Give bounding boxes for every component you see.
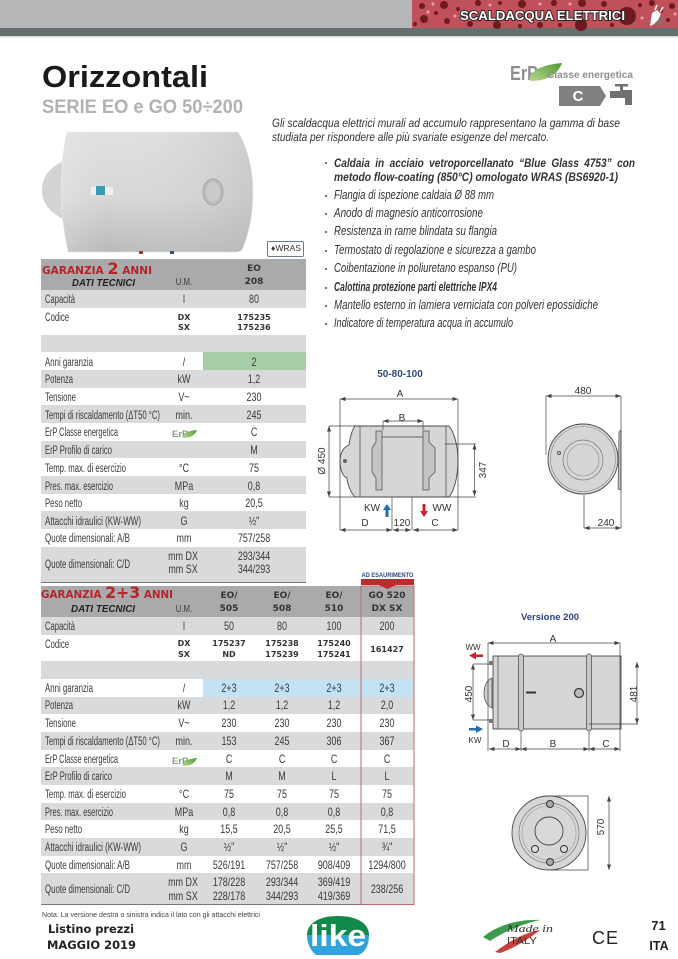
subtitle: SERIE EO e GO 50÷200 bbox=[42, 97, 243, 118]
column GO 520 values: 75 bbox=[382, 789, 392, 801]
table 1 values: 0,8 bbox=[248, 481, 260, 493]
dimension lines bbox=[546, 396, 621, 528]
column EO/510 values: 75 bbox=[329, 789, 339, 801]
table 2 labels: Tensione bbox=[45, 718, 76, 730]
dimension labels bbox=[317, 389, 489, 529]
column GO 520 values: 200 bbox=[380, 621, 395, 633]
table 1 values: 1,2 bbox=[248, 374, 260, 386]
table 1 labels: Temp. max. di esercizio bbox=[45, 463, 126, 475]
column GO 520 values: 238/256 bbox=[371, 884, 403, 896]
table 1 labels: Potenza bbox=[45, 374, 73, 386]
feature list: metodo flow-coating (850°C) omologato WRAS (BS6920-1) bbox=[334, 172, 618, 184]
column EO/505 values: 153 bbox=[222, 736, 237, 748]
table 2 units: kW bbox=[178, 700, 191, 712]
column EO/508 values: 230 bbox=[275, 718, 290, 730]
AD ESAURIMENTO tag: AD ESAURIMENTO bbox=[362, 572, 414, 579]
price list date: Listino prezzi bbox=[48, 922, 134, 936]
table 2 header: GO 520 bbox=[369, 591, 405, 601]
dimension labels: C bbox=[431, 518, 439, 529]
column EO/510 values bbox=[317, 621, 351, 903]
energy class badge bbox=[510, 63, 633, 106]
arrow: cold water in bbox=[383, 504, 391, 517]
diagram title: 50-80-100 bbox=[377, 369, 423, 380]
column EO/508 values: 175239 bbox=[265, 650, 299, 659]
column EO/508 values: 293/344 bbox=[266, 877, 298, 889]
table 2 labels: Anni garanzia bbox=[45, 683, 93, 695]
tank outline bbox=[484, 656, 621, 729]
footnote: Nota: La versione destra o sinistra indica il lato con gli attacchi elettrici bbox=[42, 910, 260, 919]
table 2 units: kg bbox=[179, 824, 189, 836]
column EO/505 values: 15,5 bbox=[220, 824, 238, 836]
icon: tap bbox=[610, 84, 632, 105]
page number: 71 bbox=[651, 918, 666, 933]
table 1 labels: Tempi di riscaldamento (ΔT50 °C) bbox=[45, 410, 160, 422]
table 1 labels: Peso netto bbox=[45, 498, 82, 510]
table 1 values: 75 bbox=[249, 463, 259, 475]
diagram: models 50-80-100 side view bbox=[317, 369, 489, 530]
column EO/510 values: ½" bbox=[329, 842, 340, 854]
column EO/505 values: 526/191 bbox=[213, 860, 245, 872]
dimension labels: 450 bbox=[464, 685, 475, 702]
price list date bbox=[47, 922, 136, 952]
mounting plate bbox=[618, 430, 621, 490]
table 1 units: V~ bbox=[178, 392, 190, 404]
column EO/510 values: L bbox=[332, 771, 337, 783]
column EO/510 values: 25,5 bbox=[325, 824, 343, 836]
column EO/508 values: 344/293 bbox=[266, 891, 298, 903]
mounting straps bbox=[518, 654, 592, 731]
icon: ErP small: ErP bbox=[172, 756, 189, 767]
title: Orizzontali bbox=[42, 60, 208, 94]
table 1 units: MPa bbox=[175, 481, 193, 493]
column EO/508 values bbox=[265, 621, 299, 903]
column EO/508 values: 80 bbox=[277, 621, 287, 633]
table 2 labels: ErP Profilo di carico bbox=[45, 771, 112, 783]
column EO/508 values: 757/258 bbox=[266, 860, 298, 872]
table 2 labels: Tempi di riscaldamento (ΔT50 °C) bbox=[45, 736, 160, 748]
column EO/508 values: 245 bbox=[275, 736, 290, 748]
table 1 units: DX bbox=[178, 313, 191, 322]
dimension labels: KW bbox=[364, 503, 381, 514]
table 1 units: / bbox=[183, 357, 185, 369]
column EO/510 values: 230 bbox=[327, 718, 342, 730]
column GO 520 values: 0,8 bbox=[381, 807, 393, 819]
logo: like: like bbox=[310, 918, 366, 953]
feature list: Resistenza in rame blindata su flangia bbox=[334, 224, 497, 238]
column GO 520 red highlight frame bbox=[361, 586, 414, 904]
logo: made in Italy: Made in bbox=[506, 924, 553, 935]
table 2 units: min. bbox=[176, 736, 192, 748]
table 1 values: 20,5 bbox=[245, 498, 263, 510]
column GO 520 values: C bbox=[384, 754, 391, 766]
heater pipe connections bbox=[139, 251, 174, 254]
table 1 units: kW bbox=[178, 374, 191, 386]
table 2 header: GARANZIA 2+3 ANNI bbox=[41, 583, 173, 602]
column GO 520 values: 1294/800 bbox=[368, 860, 406, 872]
column EO/508 values: C bbox=[279, 754, 286, 766]
banner: red water drops bbox=[412, 0, 678, 31]
heater thermostat dial bbox=[203, 179, 223, 205]
column EO/510 values: 0,8 bbox=[328, 807, 340, 819]
table 1 header: DATI TECNICI bbox=[72, 278, 135, 289]
dimension labels: 240 bbox=[598, 518, 615, 529]
column EO/508 values: 1,2 bbox=[276, 700, 288, 712]
table 1 values: 80 bbox=[249, 294, 259, 306]
table 1 labels: Tensione bbox=[45, 392, 76, 404]
feature list: Calottina protezione parti elettriche IPX4 bbox=[334, 280, 497, 294]
feature list: Indicatore di temperatura acqua in accumulo bbox=[334, 316, 513, 330]
table 2 labels: Potenza bbox=[45, 700, 73, 712]
dimension labels: WW bbox=[465, 643, 481, 652]
dimension labels: 481 bbox=[629, 685, 640, 702]
top header band bbox=[0, 0, 678, 38]
column EO/505 values: 230 bbox=[222, 718, 237, 730]
table 1 header bbox=[41, 259, 306, 290]
table 2 labels: Codice bbox=[45, 639, 69, 651]
table 1 values: C bbox=[251, 427, 258, 439]
product photo: water heater bbox=[42, 132, 253, 254]
column EO/508 values: 75 bbox=[277, 789, 287, 801]
dimension labels: A bbox=[550, 634, 557, 645]
banner title foreground: SCALDACQUA ELETTRICI bbox=[460, 8, 625, 23]
table 1 values: M bbox=[250, 445, 258, 457]
column GO 520 values: 230 bbox=[380, 718, 395, 730]
page number: ITA bbox=[649, 939, 669, 953]
table 2 labels: ErP Classe energetica bbox=[45, 754, 118, 766]
dimension labels: 120 bbox=[394, 518, 411, 529]
table 2 units: / bbox=[183, 683, 185, 695]
diagram: models 50-80-100 front view bbox=[546, 386, 621, 529]
table 1 values: 175235 bbox=[237, 313, 271, 322]
table 2 header: EO/ bbox=[325, 591, 343, 601]
table 2 units: mm DX bbox=[168, 877, 198, 889]
column EO/508 values: M bbox=[278, 771, 286, 783]
table 2 units: mm SX bbox=[168, 891, 198, 903]
table 1 labels: Quote dimensionali: C/D bbox=[45, 559, 130, 571]
table 2 labels: Peso netto bbox=[45, 824, 82, 836]
column EO/510 values: 1,2 bbox=[328, 700, 340, 712]
mounting brackets bbox=[372, 431, 435, 490]
table 2 units: MPa bbox=[175, 807, 193, 819]
column EO/508 values: 2+3 bbox=[274, 683, 290, 695]
feature list: Termostato di regolazione e sicurezza a gambo bbox=[334, 243, 536, 257]
table 2 units: °C bbox=[179, 789, 190, 801]
dimension labels: C bbox=[602, 739, 610, 750]
ErP logo: ErP bbox=[510, 63, 538, 85]
icon: ErP small bbox=[172, 429, 197, 440]
dimension labels: 480 bbox=[575, 386, 592, 397]
dimension labels bbox=[575, 386, 615, 529]
column EO/510 values: 175241 bbox=[317, 650, 351, 659]
table 1 values: 175236 bbox=[237, 323, 271, 332]
dimension labels: B bbox=[550, 739, 557, 750]
column EO/505 values: ½" bbox=[224, 842, 235, 854]
feature list: Flangia di ispezione caldaia Ø 88 mm bbox=[334, 188, 494, 202]
column GO 520 values: 367 bbox=[380, 736, 395, 748]
table 2 units: G bbox=[181, 842, 187, 854]
table 2 row backgrounds bbox=[41, 617, 414, 905]
table 1 header: U.M. bbox=[176, 276, 192, 287]
diagram: version 200 side view bbox=[464, 612, 640, 751]
table 2 labels: Temp. max. di esercizio bbox=[45, 789, 126, 801]
table 1 values: 245 bbox=[247, 410, 262, 422]
table 2 labels: Quote dimensionali: A/B bbox=[45, 860, 130, 872]
table: garanzia 2+3 anni bbox=[41, 572, 414, 905]
banner title outline: SCALDACQUA ELETTRICI bbox=[460, 8, 625, 23]
icon: ErP small: ErP bbox=[172, 429, 189, 440]
table 1 units: kg bbox=[179, 498, 189, 510]
intro text: studiata per rispondere alle più svariate esigenze del mercato. bbox=[272, 130, 549, 144]
tank outline bbox=[340, 426, 458, 497]
arrow: hot water out bbox=[469, 652, 483, 660]
column EO/508 values: 20,5 bbox=[273, 824, 291, 836]
table 1 header: GARANZIA 2 ANNI bbox=[42, 259, 152, 278]
dimension lines bbox=[329, 399, 476, 530]
column EO/505 values: 175237 bbox=[212, 639, 246, 648]
table 1 units: G bbox=[181, 516, 187, 528]
table 2 labels: Pres. max. esercizio bbox=[45, 807, 113, 819]
column GO 520 values: L bbox=[385, 771, 390, 783]
dimension label: 570 bbox=[596, 818, 607, 835]
table 2 header: 505 bbox=[220, 604, 238, 614]
table 1 labels: Capacità bbox=[45, 294, 75, 306]
table 1 header: EO bbox=[247, 264, 261, 274]
table 1 units: °C bbox=[179, 463, 190, 475]
column EO/510 values: 175240 bbox=[317, 639, 351, 648]
table 2 header: 510 bbox=[325, 604, 343, 614]
table 2 units: DX bbox=[178, 639, 191, 648]
table 1 values: 230 bbox=[247, 392, 262, 404]
energy class label: Classe energetica bbox=[547, 69, 633, 81]
feature list: Caldaia in acciaio vetroporcellanato “Blue Glass 4753” con bbox=[334, 158, 635, 170]
column EO/505 values: 1,2 bbox=[223, 700, 235, 712]
table 1 labels: Pres. max. esercizio bbox=[45, 481, 113, 493]
column EO/510 values: 2+3 bbox=[326, 683, 342, 695]
table 2 units: V~ bbox=[178, 718, 190, 730]
table 1 values: 2 bbox=[252, 357, 257, 369]
dimension labels: D bbox=[502, 739, 510, 750]
table 2 header: U.M. bbox=[176, 603, 192, 614]
WRAS badge: ♦WRAS bbox=[271, 243, 301, 253]
table 1 units: l bbox=[183, 294, 185, 306]
column EO/505 values: ND bbox=[222, 650, 236, 659]
column EO/508 values: 0,8 bbox=[276, 807, 288, 819]
arrow: hot water out bbox=[420, 504, 428, 517]
table 1 values: 293/344 bbox=[238, 551, 270, 563]
column EO/510 values: 100 bbox=[327, 621, 342, 633]
table 2 labels: Quote dimensionali: C/D bbox=[45, 884, 130, 896]
table 2 units: l bbox=[183, 621, 185, 633]
column GO 520 values: 161427 bbox=[370, 645, 404, 654]
table 2 units bbox=[168, 621, 198, 903]
intro text bbox=[272, 116, 620, 144]
table 2 units: SX bbox=[178, 650, 191, 659]
tank circle bbox=[548, 424, 618, 494]
column EO/505 values: 75 bbox=[224, 789, 234, 801]
table 1 units: SX bbox=[178, 323, 191, 332]
column EO/510 values: 306 bbox=[327, 736, 342, 748]
column GO 520 values: 71,5 bbox=[378, 824, 396, 836]
price list date: MAGGIO 2019 bbox=[47, 938, 136, 952]
table 2 labels: Attacchi idraulici (KW-WW) bbox=[45, 842, 141, 854]
column GO 520 values bbox=[368, 621, 406, 896]
energy class arrow C: C bbox=[573, 88, 584, 105]
dimension labels: A bbox=[397, 389, 404, 400]
table 1 labels: ErP Classe energetica bbox=[45, 427, 118, 439]
column GO 520 values: ¾" bbox=[382, 842, 393, 854]
feature list: Anodo di magnesio anticorrosione bbox=[333, 206, 483, 220]
column EO/505 values: 228/178 bbox=[213, 891, 245, 903]
dimension lines bbox=[473, 643, 638, 751]
dimension labels: KW bbox=[469, 736, 482, 745]
table 1 units bbox=[168, 294, 198, 576]
table 1 values bbox=[237, 294, 271, 576]
WRAS badge bbox=[268, 242, 304, 256]
table 2 header: DATI TECNICI bbox=[71, 604, 135, 615]
dimension labels: Ø 450 bbox=[317, 447, 328, 475]
diagram: version 200 front view bbox=[512, 796, 609, 870]
dimension line bbox=[608, 796, 610, 870]
table 2 header: DX SX bbox=[372, 604, 403, 614]
column EO/505 values bbox=[212, 621, 246, 903]
dimension labels: B bbox=[399, 413, 406, 424]
logo: made in Italy bbox=[483, 920, 553, 953]
table 1 units: mm DX bbox=[168, 551, 198, 563]
intro text: Gli scaldacqua elettrici murali ad accumulo rappresentano la gamma di base bbox=[272, 116, 620, 130]
table 2 header: EO/ bbox=[273, 591, 291, 601]
column GO 520 values: 2,0 bbox=[381, 700, 393, 712]
diagram title: Versione 200 bbox=[521, 612, 579, 623]
column GO 520 values: 2+3 bbox=[379, 683, 395, 695]
heater logo label bbox=[91, 186, 113, 195]
dimension labels: 347 bbox=[478, 461, 489, 478]
column EO/505 values: 178/228 bbox=[213, 877, 245, 889]
table 2 units: mm bbox=[177, 860, 191, 872]
column EO/505 values: 50 bbox=[224, 621, 234, 633]
column EO/510 values: C bbox=[331, 754, 338, 766]
table 1 labels: Quote dimensionali: A/B bbox=[45, 533, 130, 545]
icon: electric plug bbox=[650, 5, 664, 27]
column EO/508 values: ½" bbox=[277, 842, 288, 854]
table 1 units: min. bbox=[176, 410, 192, 422]
table 1 labels: Codice bbox=[45, 312, 69, 324]
page number bbox=[649, 918, 669, 953]
table: garanzia 2 anni bbox=[41, 259, 306, 583]
column EO/505 values: M bbox=[225, 771, 233, 783]
table 1 values: ½" bbox=[249, 516, 260, 528]
dimension labels bbox=[464, 634, 640, 750]
CE mark: CE bbox=[592, 928, 619, 948]
table 2 header: 508 bbox=[273, 604, 291, 614]
dimension labels: WW bbox=[433, 503, 452, 514]
table 2 header: EO/ bbox=[220, 591, 238, 601]
table 2 labels bbox=[45, 621, 160, 896]
table 1 header: 208 bbox=[245, 277, 263, 287]
column EO/510 values: 908/409 bbox=[318, 860, 350, 872]
table 1 values: 344/293 bbox=[238, 564, 270, 576]
column EO/505 values: 0,8 bbox=[223, 807, 235, 819]
column EO/510 values: 419/369 bbox=[318, 891, 350, 903]
table 1 labels: ErP Profilo di carico bbox=[45, 445, 112, 457]
logo: made in Italy: ITALY bbox=[507, 936, 537, 947]
tank circle bbox=[512, 796, 588, 870]
table 1 units: mm bbox=[177, 533, 191, 545]
feature list: Coibentazione in poliuretano espanso (PU) bbox=[334, 261, 517, 275]
table 1 labels: Anni garanzia bbox=[45, 357, 93, 369]
icon: ErP small bbox=[172, 756, 197, 767]
table 1 row backgrounds bbox=[41, 290, 306, 583]
feature list: Mantello esterno in lamiera verniciata con polveri epossidiche bbox=[334, 298, 598, 312]
AD ESAURIMENTO tag bbox=[361, 572, 414, 589]
table 1 labels bbox=[45, 294, 160, 571]
column EO/508 values: 175238 bbox=[265, 639, 299, 648]
table 1 labels: Attacchi idraulici (KW-WW) bbox=[45, 516, 141, 528]
column EO/505 values: 2+3 bbox=[221, 683, 237, 695]
table 1 values: 757/258 bbox=[238, 533, 270, 545]
feature list bbox=[325, 158, 635, 330]
table 1 units: mm SX bbox=[168, 564, 198, 576]
column EO/510 values: 369/419 bbox=[318, 877, 350, 889]
arrow: cold water in bbox=[469, 726, 483, 733]
column EO/505 values: C bbox=[226, 754, 233, 766]
dimension labels: D bbox=[361, 518, 369, 529]
table 2 labels: Capacità bbox=[45, 621, 75, 633]
table 2 header bbox=[41, 583, 414, 617]
